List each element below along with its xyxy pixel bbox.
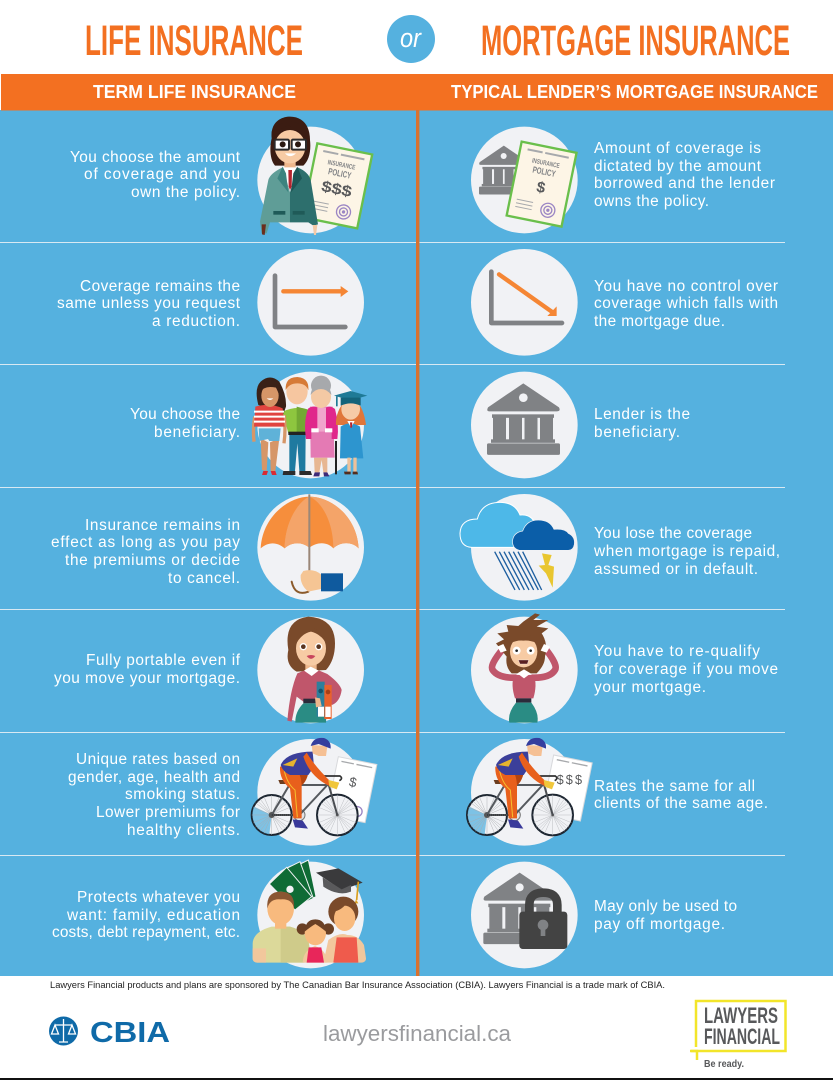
row 7 right text: May only be used to [594,898,737,915]
icon: bank with padlock [471,862,578,968]
row 1 right text [594,140,775,210]
row 5 left text: you move your mortgage. [54,670,240,687]
icon: storm clouds [460,494,578,601]
row 3 right text: beneficiary. [594,424,680,441]
row 1 left text [70,149,241,201]
logo: Lawyers Financial: FINANCIAL [704,1024,780,1049]
badge: or: or [400,23,422,53]
icon: umbrella in hand [257,494,364,601]
row 6 right text: Rates the same for all [594,778,755,795]
icon: family beneficiaries [253,372,367,478]
icon: lender bank [471,372,578,478]
row 4 left text [51,517,240,587]
icon: woman holding binders [257,617,364,723]
logo: CBIA [49,1016,170,1049]
icon: stressed woman [471,613,578,723]
row 7 right text: pay off mortgage. [594,916,725,933]
icon: bank with insurance policy $ [471,127,578,233]
row 6 right text [594,778,768,812]
logo: Lawyers Financial: LAWYERS [704,1003,778,1028]
row 7 right text [594,898,737,933]
row 7 left text: costs, debt repayment, etc. [52,924,240,941]
row 1 left text: You choose the amount [70,149,241,166]
grandmother [305,376,338,476]
row 4 right text [593,525,780,578]
row 5 left text: Fully portable even if [86,652,241,669]
row 5 right text: for coverage if you move [594,661,778,678]
disclaimer text: Lawyers Financial products and plans are sponsored by The Canadian Bar Insurance Association (CBIA). Lawyers Financial is a trade mark of CBIA. [50,980,665,991]
row 4 left text: the premiums or decide [65,552,240,569]
icon: bank with insurance policy $: $ [535,179,547,197]
icon: cyclist with $$$ document: $$$ [557,773,582,787]
row 2 right text: the mortgage due. [594,313,725,330]
icon: bank with insurance policy $: POLICY [532,165,557,179]
icon: cyclist with $ document: $ [348,774,359,790]
row 6 left text: healthy clients. [127,822,240,839]
icon: woman with insurance policy $$$: INSURANCE [327,159,356,172]
row 6 right text: clients of the same age. [594,795,768,812]
icon: woman with insurance policy $$$ [257,117,372,235]
icon: woman with insurance policy $$$: POLICY [327,166,352,181]
row 4 right text: You lose the coverage [594,525,752,542]
row 2 right text: coverage which falls with [594,295,778,312]
row 7 left text [52,889,240,941]
icon: family, money and graduation cap [253,860,366,968]
row 4 left text: effect as long as you pay [51,534,240,551]
row 3 left text [130,406,240,441]
row 3 left text: beneficiary. [154,424,240,441]
row 6 left text: Lower premiums for [96,804,240,821]
row 3 left text: You choose the [130,406,240,423]
woman in stripes [253,377,286,475]
heading: term life insurance: TERM LIFE INSURANCE [93,81,296,102]
row 1 right text: owns the policy. [594,193,709,210]
row 1 left text: of coverage and you [84,166,240,183]
row 4 left text: Insurance remains in [85,517,240,534]
row 2 left text: Coverage remains the [80,278,240,295]
logo: CBIA: CBIA [90,1017,170,1049]
row 4 left text: to cancel. [168,570,240,587]
row 1 left text: own the policy. [131,184,240,201]
row 2 right text [594,278,778,330]
graduate [334,391,367,474]
row 5 right text: your mortgage. [594,679,706,696]
row 5 right text [594,643,778,696]
logo: Lawyers Financial: Be ready. [704,1059,744,1070]
website url: lawyersfinancial.ca [323,1021,512,1046]
row 4 right text: when mortgage is repaid, [593,543,780,560]
row 6 left text: gender, age, health and [68,769,240,786]
row 2 left text [57,278,241,330]
row 1 right text: Amount of coverage is [594,140,761,157]
row 3 right text [594,406,690,441]
logo: Lawyers Financial [690,1001,786,1070]
icon: cyclist with $ document [252,738,377,846]
badge: or [387,15,435,63]
row 7 left text: want: family, education [66,907,240,924]
row 3 right text: Lender is the [594,406,690,423]
man [283,377,312,475]
title: life insurance: LIFE INSURANCE [85,17,303,65]
row 2 left text: a reduction. [152,313,240,330]
row 4 right text: assumed or in default. [594,561,758,578]
row 2 right text: You have no control over [594,278,778,295]
row 5 left text [54,652,241,687]
row 7 left text: Protects whatever you [77,889,240,906]
row 5 right text: You have to re-qualify [594,643,760,660]
icon: woman with insurance policy $$$: $$$ [320,178,354,201]
row 6 left text: smoking status. [125,786,240,803]
icon: flat coverage chart [257,249,364,356]
icon: cyclist with $$$ document [467,738,592,846]
row 1 right text: borrowed and the lender [594,175,775,192]
header bar [1,74,833,110]
icon: falling coverage chart [471,249,578,356]
row 6 left text: Unique rates based on [76,751,240,768]
row 2 left text: same unless you request [57,295,241,312]
row 6 left text [68,751,240,839]
icon: bank with insurance policy $: INSURANCE [531,158,561,170]
row 1 right text: dictated by the amount [594,158,762,175]
